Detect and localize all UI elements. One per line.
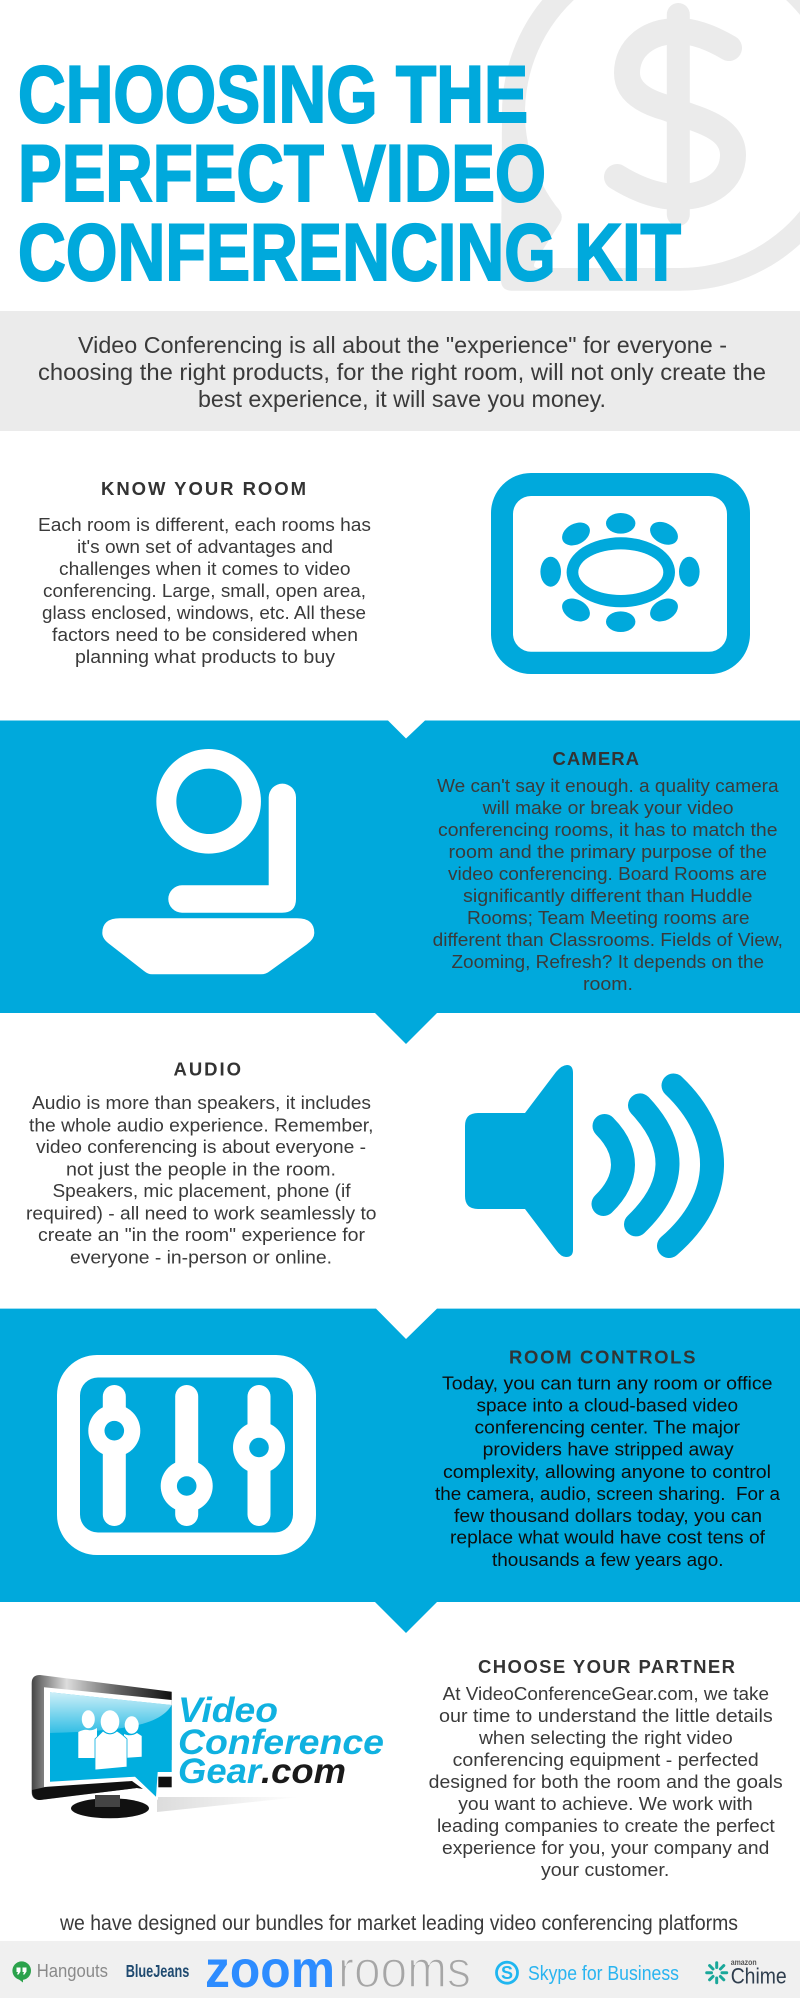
text block: camera: different than Classrooms. Fields of View, <box>433 930 783 950</box>
text block: room controls: thousands a few years ago. <box>492 1550 724 1570</box>
panel: know your room <box>38 473 750 674</box>
text block: choose your partner: At VideoConferenceGear.com, we take <box>443 1684 769 1704</box>
logo: BlueJeans: BlueJeans <box>126 1961 189 1981</box>
logo: VideoConferenceGear.com <box>32 1675 384 1818</box>
panel: choose your partner <box>32 1656 783 1880</box>
text block: know your room: Each room is different, each rooms has <box>38 515 371 535</box>
text block: camera: video conferencing. Board Rooms are <box>448 864 767 884</box>
logo: Skype for Business: S <box>501 1963 513 1983</box>
text block: know your room: planning what products to buy <box>75 647 335 667</box>
panel: intro band: Video Conferencing is all about the "experience" for everyone - <box>78 332 727 358</box>
logo: VideoConferenceGear.com: .com <box>261 1752 346 1791</box>
text block: audio: Speakers, mic placement, phone (if <box>52 1181 352 1201</box>
logo: zoom rooms: zoom <box>205 1941 335 1999</box>
logo: amazon Chime: amazon <box>731 1958 757 1967</box>
text block: room controls: the camera, audio, screen sharing. For a <box>435 1484 781 1504</box>
text block: choose your partner: leading companies to create the perfect <box>437 1816 775 1836</box>
text block: choose your partner: our time to understand the little details <box>439 1706 773 1726</box>
text block: choose your partner <box>429 1684 783 1880</box>
logo: VideoConferenceGear.com: Video <box>178 1691 278 1730</box>
logo: zoom rooms <box>205 1941 471 1999</box>
text block: camera: significantly different than Huddle <box>463 886 752 906</box>
text block: camera <box>433 776 783 994</box>
icon: conference room table <box>491 473 750 674</box>
text block: audio: everyone - in-person or online. <box>70 1247 332 1267</box>
text block: camera: conferencing rooms, it has to match the <box>438 820 778 840</box>
title: CHOOSING THE <box>18 50 528 140</box>
text block: audio: Audio is more than speakers, it includes <box>32 1093 371 1113</box>
logo: amazon Chime: Chime <box>731 1963 787 1988</box>
text block: room controls: replace what would have cost tens of <box>450 1528 766 1548</box>
text block: audio: not just the people in the room. <box>66 1159 336 1179</box>
text block: camera: room and the primary purpose of the <box>448 842 767 862</box>
logo: amazon Chime <box>707 1958 787 1988</box>
heading: know your room: KNOW YOUR ROOM <box>101 478 306 499</box>
panel: platform logos <box>0 1941 800 1999</box>
text block: choose your partner: when selecting the right video <box>478 1728 733 1748</box>
text block: camera: Rooms; Team Meeting rooms are <box>467 908 750 928</box>
panel: audio <box>26 1058 712 1267</box>
heading: audio: AUDIO <box>174 1058 241 1080</box>
text block: camera: room. <box>583 974 633 994</box>
logo: VideoConferenceGear.com: Gear <box>178 1752 263 1791</box>
text block: room controls <box>435 1374 781 1570</box>
text block: platforms tagline: we have designed our bundles for market leading video conferencing platforms <box>59 1912 738 1935</box>
text block: audio: create an "in the room" experience for <box>38 1225 365 1245</box>
text block: room controls: space into a cloud-based video <box>476 1396 738 1416</box>
panel: intro band: best experience, it will save you money. <box>198 386 606 412</box>
title: PERFECT VIDEO <box>18 129 546 219</box>
text block: choose your partner: conferencing equipment - perfected <box>453 1750 759 1770</box>
text block: choose your partner: your customer. <box>541 1860 669 1880</box>
text block: room controls: Today, you can turn any room or office <box>442 1374 772 1394</box>
text block: camera: We can't say it enough. a quality camera <box>437 776 780 796</box>
text block: choose your partner: experience for you, your company and <box>442 1838 769 1858</box>
panel: intro band <box>0 311 800 431</box>
logo: zoom rooms: rooms <box>338 1941 471 1999</box>
logo: Skype for Business: Skype for Business <box>528 1962 679 1985</box>
logo: Hangouts: Hangouts <box>37 1961 108 1981</box>
logo: VideoConferenceGear.com: Conference <box>178 1723 384 1762</box>
text block: camera: Zooming, Refresh? It depends on the <box>452 952 764 972</box>
text block: audio: video conferencing is about everyone - <box>36 1137 366 1157</box>
text block: know your room: challenges when it comes to video <box>59 559 350 579</box>
logo: Hangouts <box>12 1961 108 1982</box>
text block: room controls: conferencing center. The major <box>474 1418 740 1438</box>
icon: speaker <box>465 1065 712 1257</box>
text block: know your room: conferencing. Large, small, open area, <box>43 581 366 601</box>
icon: camera <box>102 749 314 974</box>
panel: camera <box>0 720 800 1044</box>
text block: audio <box>26 1093 376 1267</box>
panel: room controls <box>0 1309 800 1633</box>
icon: dollar speech bubble watermark <box>501 0 800 291</box>
title <box>18 50 681 298</box>
text block: know your room: glass enclosed, windows, etc. All these <box>42 603 366 623</box>
heading: choose your partner: CHOOSE YOUR PARTNER <box>478 1656 735 1677</box>
text block: know your room: factors need to be considered when <box>52 625 358 645</box>
icon: sliders <box>57 1355 316 1555</box>
text block: room controls: few thousand dollars today, you can <box>454 1506 762 1526</box>
text block: audio: required) - all need to work seamlessly to <box>26 1203 376 1223</box>
text block: camera: will make or break your video <box>482 798 734 818</box>
text block: room controls: providers have stripped away <box>483 1440 734 1460</box>
panel: intro band: choosing the right products, for the right room, will not only create the <box>38 359 766 385</box>
text block: know your room: it's own set of advantages and <box>77 537 333 557</box>
text block: room controls: complexity, allowing anyone to control <box>443 1462 771 1482</box>
text block: choose your partner: you want to achieve. We work with <box>458 1794 753 1814</box>
text block: choose your partner: designed for both the room and the goals <box>429 1772 783 1792</box>
text block: know your room <box>38 515 371 667</box>
text block: audio: the whole audio experience. Remember, <box>29 1115 374 1135</box>
heading: room controls: ROOM CONTROLS <box>509 1346 696 1368</box>
heading: camera: CAMERA <box>552 748 639 769</box>
